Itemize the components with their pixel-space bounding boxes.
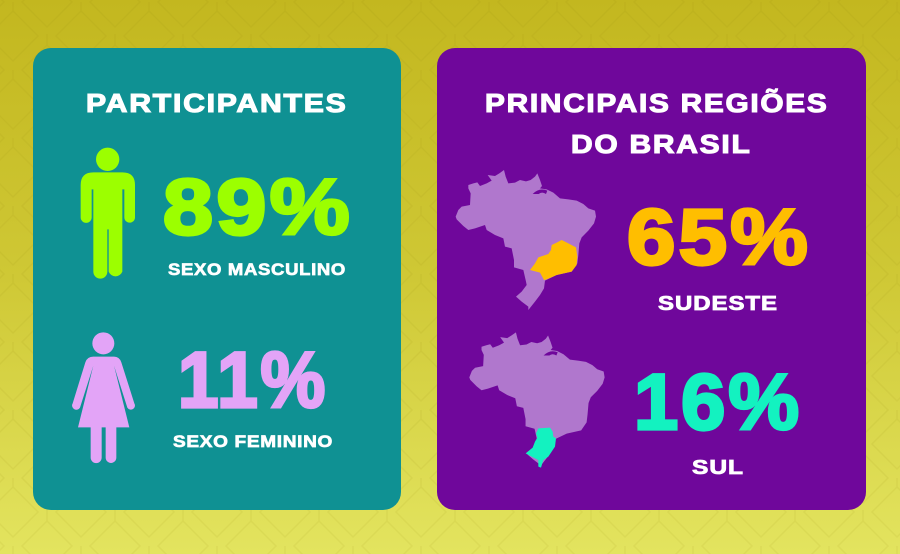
icon: woman xyxy=(72,332,135,463)
panel: principais regiões xyxy=(437,48,866,510)
heading: principais regiões do brasil xyxy=(485,88,828,159)
label: sudeste: SUDESTE xyxy=(658,293,778,315)
panel: participantes xyxy=(33,48,401,510)
icon: man xyxy=(81,148,135,279)
stat: 89%: 89% xyxy=(163,162,353,251)
heading: participantes: PARTICIPANTES xyxy=(86,88,348,118)
map: sudeste highlighted xyxy=(456,170,596,310)
stat: 16%: 16% xyxy=(634,357,802,446)
heading: principais regiões do brasil: DO BRASIL xyxy=(571,129,752,159)
stat: 65%: 65% xyxy=(627,192,811,281)
label: sexo feminino: SEXO FEMININO xyxy=(173,432,333,451)
map: sul highlighted xyxy=(469,332,605,468)
heading: principais regiões do brasil: PRINCIPAIS REGIÕES xyxy=(485,88,828,118)
label: sul: SUL xyxy=(692,457,744,479)
label: sexo masculino: SEXO MASCULINO xyxy=(168,260,346,279)
stat: 11%: 11% xyxy=(178,335,328,424)
